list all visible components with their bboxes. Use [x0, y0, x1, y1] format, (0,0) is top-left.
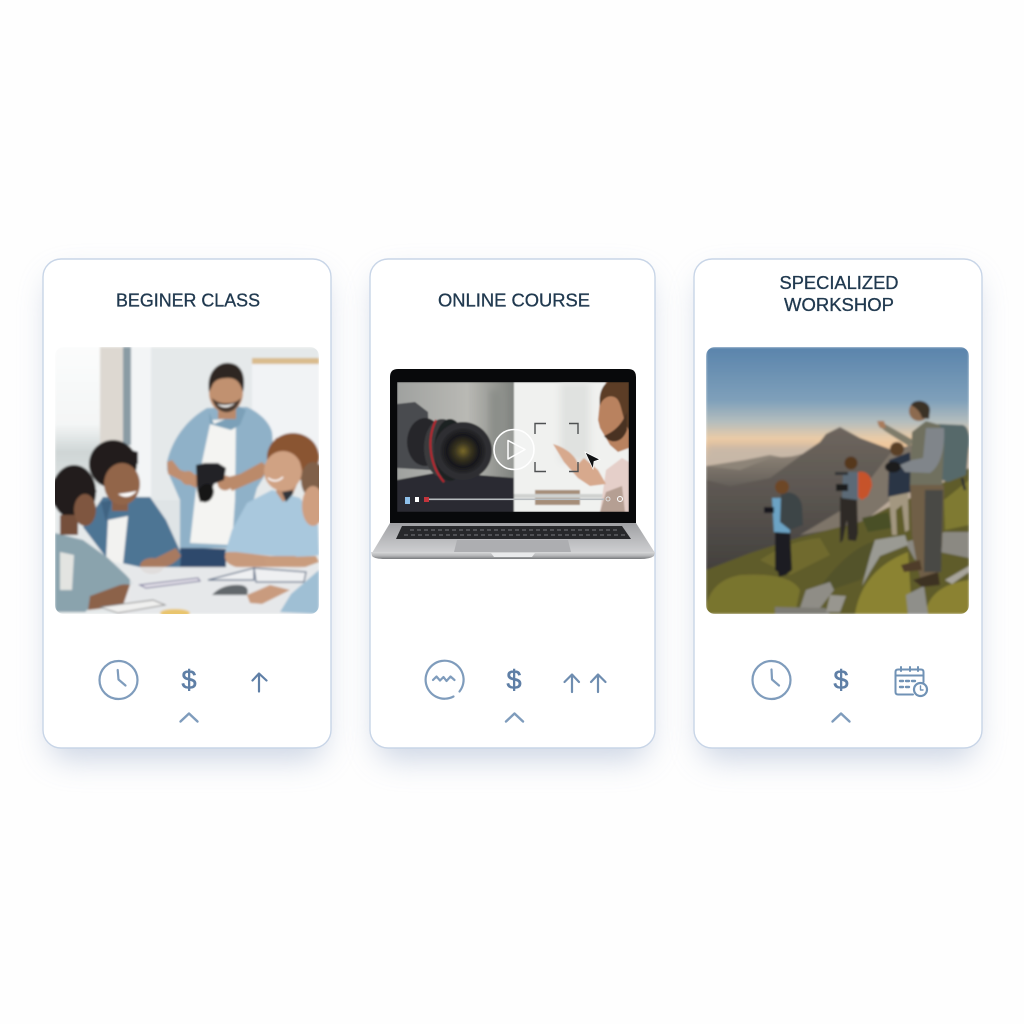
icon: clock	[752, 661, 790, 699]
heading: specialized workshop: SPECIALIZED	[780, 272, 898, 293]
icon: dollar price: $	[506, 665, 522, 695]
laptop keyboard deck	[372, 523, 655, 553]
icon: chevron up	[180, 714, 198, 722]
heading: online course: ONLINE COURSE	[438, 290, 590, 310]
icon: chevron up	[832, 714, 850, 722]
icon: calendar with clock	[896, 667, 927, 696]
icon: chevron up	[506, 714, 523, 722]
panel: online course card	[370, 259, 655, 760]
cursor arrow	[585, 452, 600, 469]
photo: hikers photographing on a mountain ridge	[706, 347, 969, 614]
photo: students around a table with instructor holding a camera	[52, 347, 325, 617]
focus frame brackets	[535, 424, 578, 472]
heading: specialized workshop: WORKSHOP	[784, 294, 894, 315]
panel: specialized workshop card	[694, 259, 982, 760]
heading: beginer class: BEGINER CLASS	[116, 290, 260, 310]
icon: wave circle	[426, 661, 464, 699]
icon: dollar price: $	[181, 665, 197, 695]
icon: double up arrows	[564, 674, 606, 692]
heading: specialized workshop	[780, 272, 898, 315]
icon: clock	[100, 661, 138, 699]
panel: beginner class card	[43, 259, 331, 760]
icon: dollar price: $	[833, 665, 849, 695]
play button	[494, 430, 534, 470]
illustration: laptop showing video lesson	[371, 369, 655, 559]
video player controls	[405, 496, 622, 504]
icon: up arrow	[252, 674, 266, 692]
